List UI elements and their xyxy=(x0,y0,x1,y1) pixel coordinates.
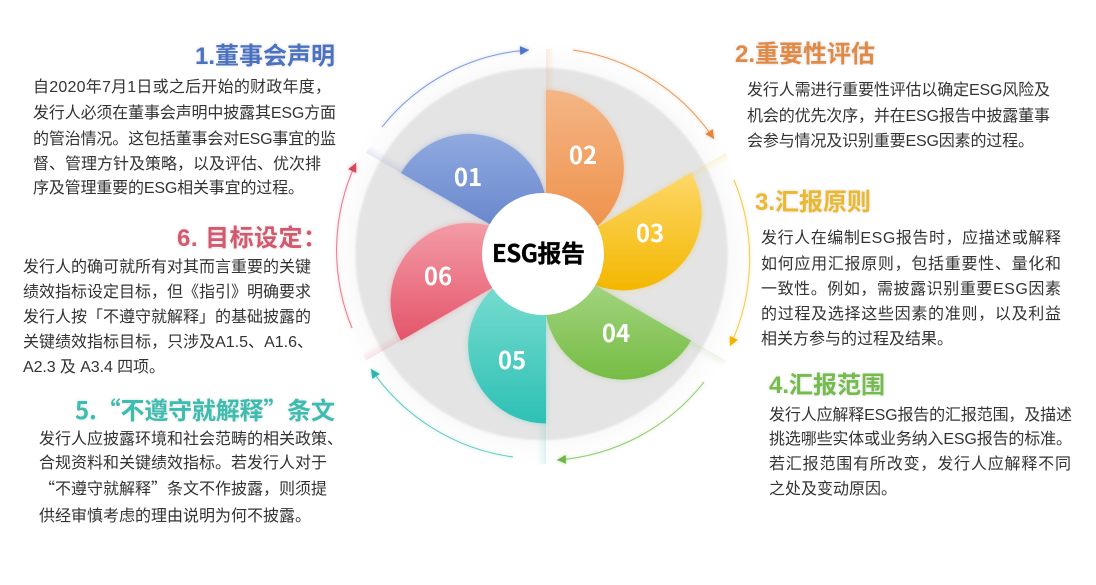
arrow arc 6: red xyxy=(337,163,356,328)
body text 4: 挑选哪些实体或业务纳入ESG报告的标准。 xyxy=(769,430,1072,448)
body text 1: 发行人必须在董事会声明中披露其ESG方面 xyxy=(33,104,336,122)
body text 6: 发行人按「不遵守就解释」的基础披露的 xyxy=(23,307,311,326)
body text 6: 绩效指标设定目标，但《指引》明确要求 xyxy=(23,283,311,301)
body text 4 xyxy=(769,405,1072,498)
body text 6 xyxy=(23,258,313,376)
petal 02 xyxy=(546,90,624,246)
heading 1: 1.董事会声明 xyxy=(195,43,335,70)
heading 4: 4.汇报范围 xyxy=(769,372,885,399)
body text 1: 自2020年7月1日或之后开始的财政年度， xyxy=(33,78,331,96)
petal 06 xyxy=(391,223,536,340)
body text 2: 发行人需进行重要性评估以确定ESG风险及 xyxy=(747,81,1050,99)
section 2: materiality assessment xyxy=(735,41,1050,150)
petal number 02: 02 xyxy=(569,136,597,171)
body text 4: 若汇报范围有所改变，发行人应解释不同 xyxy=(769,454,1071,473)
petal number 05: 05 xyxy=(498,341,526,376)
body text 4: 发行人应解释ESG报告的汇报范围，及描述 xyxy=(769,405,1072,424)
body text 6: 发行人的确可就所有对其而言重要的关键 xyxy=(23,258,311,276)
heading 3: 3.汇报原则 xyxy=(755,189,871,216)
body text 1: 的管治情况。这包括董事会对ESG事宜的监 xyxy=(33,130,336,148)
body text 6: A2.3 及 A3.4 四项。 xyxy=(23,359,165,376)
body text 3: 相关方参与的过程及结果。 xyxy=(761,330,953,348)
petal 05 xyxy=(468,268,546,424)
body text 3: 发行人在编制ESG报告时，应描述或解释 xyxy=(761,228,1061,247)
arrow arc 1: blue xyxy=(382,50,529,127)
body text 5 xyxy=(39,425,343,526)
center label: ESG报告 xyxy=(492,234,585,269)
body text 4: 之处及变动原因。 xyxy=(769,480,897,498)
body text 5: 发行人应披露环境和社会范畴的相关政策、 xyxy=(39,425,343,449)
body text 6: 关键绩效指标目标，只涉及A1.5、A1.6、 xyxy=(23,333,313,351)
body text 3: 一致性。例如，需披露识别重要ESG因素 xyxy=(761,280,1061,298)
section 3: reporting principles xyxy=(755,189,1061,348)
outer halo ring xyxy=(330,42,754,466)
section 5: comply or explain xyxy=(39,391,343,526)
arrow arc 5: teal xyxy=(371,369,513,457)
body text 3: 如何应用汇报原则，包括重要性、量化和 xyxy=(761,254,1061,273)
body text 3: 的过程及选择这些因素的准则，以及利益 xyxy=(761,305,1061,323)
arrow arc 4: green xyxy=(557,382,704,460)
body text 1: 序及管理重要的ESG相关事宜的过程。 xyxy=(33,179,304,197)
body text 5: 合规资料和关键绩效指标。若发行人对于 xyxy=(39,449,327,473)
section 4: reporting boundary xyxy=(769,372,1072,498)
section 6: target setting xyxy=(23,225,327,376)
body text 2 xyxy=(747,81,1050,150)
body text 1 xyxy=(33,78,336,197)
section 1: board statement xyxy=(33,43,336,197)
heading 2: 2.重要性评估 xyxy=(735,41,875,68)
petal number 03: 03 xyxy=(636,214,664,249)
spoke highlights xyxy=(362,49,730,464)
petal number 01: 01 xyxy=(454,158,482,193)
body text 1: 督、管理方针及策略，以及评估、优次排 xyxy=(33,155,321,173)
arrow arc 2: orange xyxy=(573,50,714,139)
center hub circle xyxy=(482,193,604,315)
body text 5: “不遵守就解释”条文不作披露，则须提 xyxy=(39,475,327,499)
heading 6: 6. 目标设定： xyxy=(177,225,327,252)
petal 04 xyxy=(545,262,691,380)
petal 01 xyxy=(401,134,547,251)
body text 5: 供经审慎考虑的理由说明为何不披露。 xyxy=(39,502,311,526)
heading 5: 5.“不遵守就解释”条文 xyxy=(75,391,335,426)
petal 03 xyxy=(556,173,701,290)
body text 2: 机会的优先次序，并在ESG报告中披露董事 xyxy=(747,107,1050,125)
body text 3 xyxy=(761,228,1061,348)
grey disc xyxy=(356,68,728,440)
central radial diagram xyxy=(330,42,754,466)
arrow arc 3: yellow xyxy=(730,180,750,346)
body text 2: 会参与情况及识别重要ESG因素的过程。 xyxy=(747,132,1034,150)
petal number 06: 06 xyxy=(424,257,452,292)
petal number 04: 04 xyxy=(602,314,630,349)
